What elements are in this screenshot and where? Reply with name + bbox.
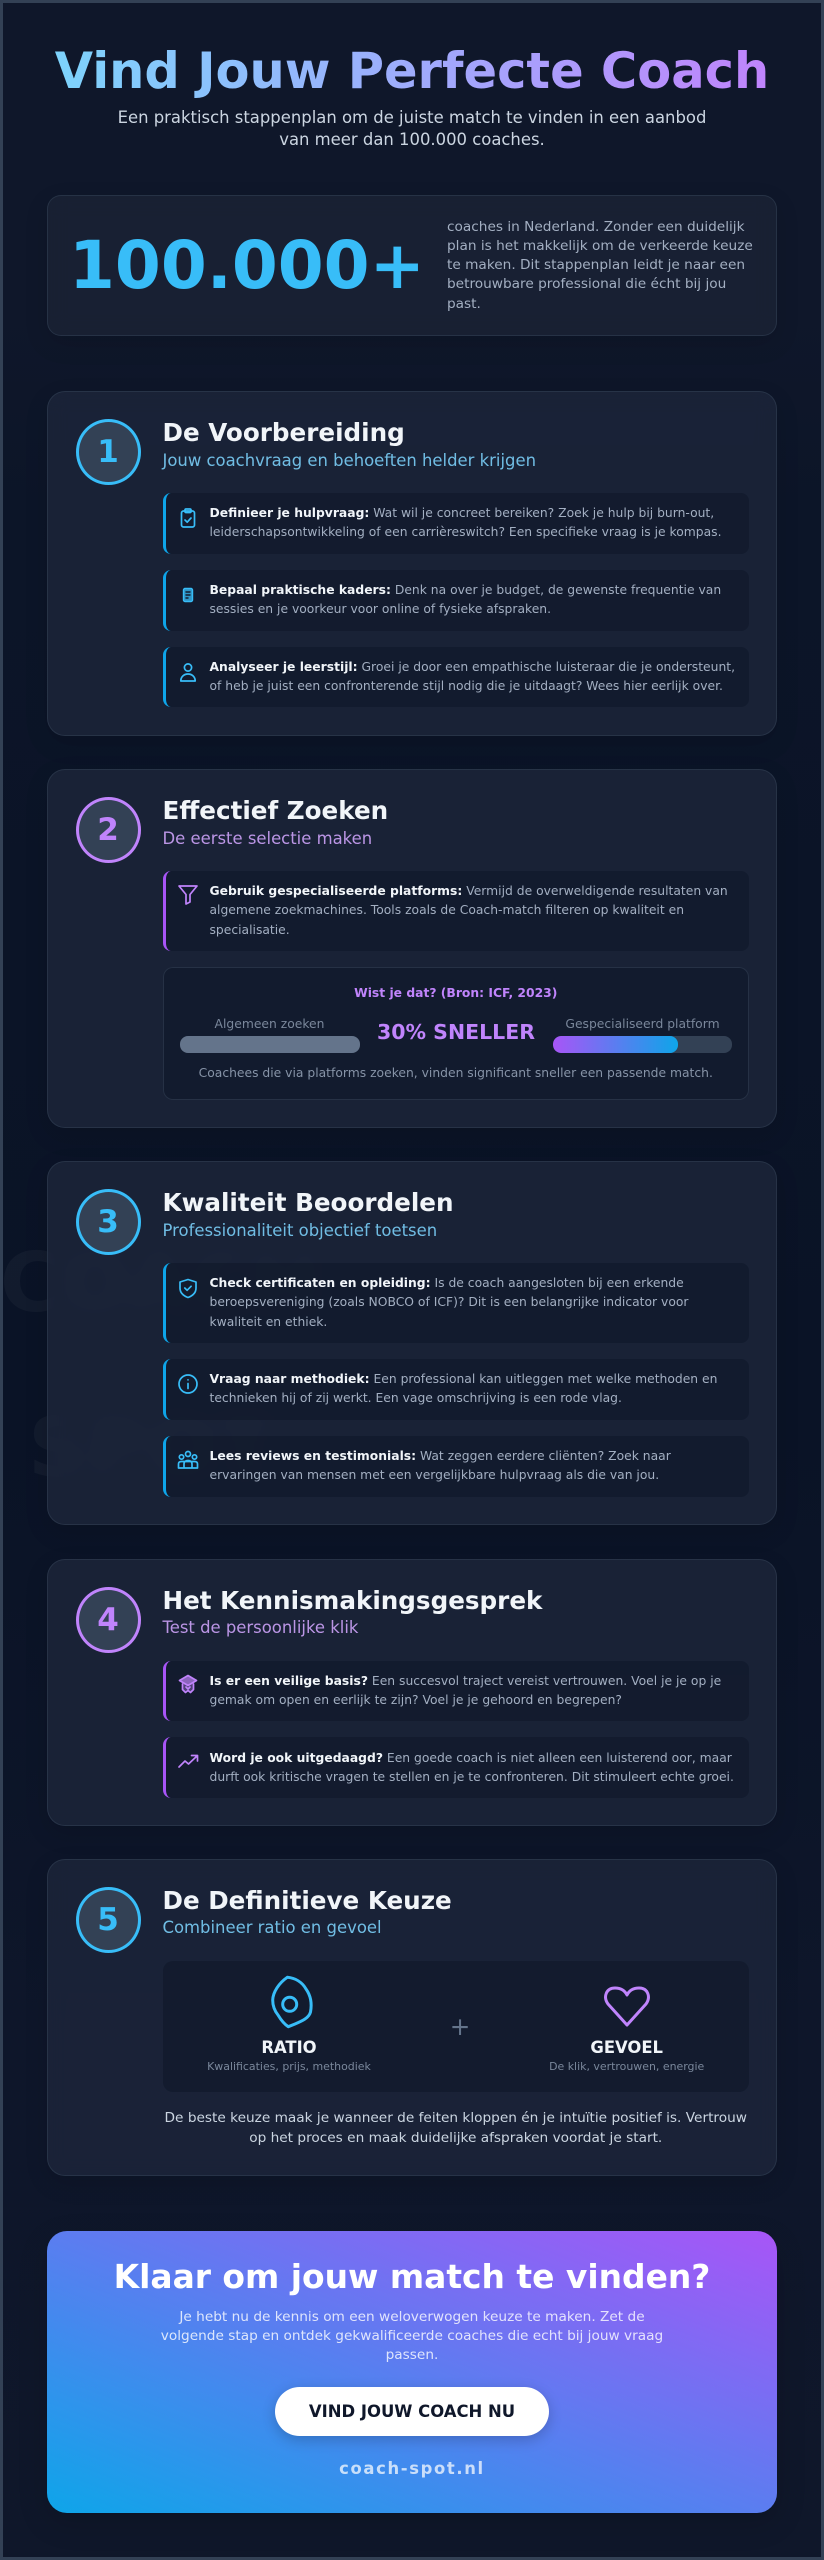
- subtitle: Een praktisch stappenplan om de juiste match te vinden in een aanbod: [118, 108, 706, 127]
- highlighted result: 30% SNELLER: [377, 1020, 535, 1044]
- subtitle: [118, 108, 706, 149]
- step 2 subheading: De eerste selectie maken: [162, 828, 372, 848]
- title: Vind Jouw Perfecte Coach: [55, 42, 769, 100]
- hero description: betrouwbare professional die écht bij jou: [447, 276, 726, 292]
- feeling label: GEVOEL: [590, 2038, 663, 2057]
- step 5 heading: De Definitieve Keuze: [162, 1886, 452, 1915]
- step 5 subheading: Combineer ratio en gevoel: [162, 1918, 382, 1937]
- item: veilige basis: [162, 1661, 749, 1721]
- step number 5: [76, 1887, 140, 1953]
- cta button: VIND JOUW COACH NU: [309, 2402, 515, 2421]
- item: hulpvraag: [162, 493, 749, 554]
- icon: ratio: [271, 1976, 313, 2028]
- step number 1: [76, 419, 140, 485]
- cta description: volgende stap en ontdek gekwalificeerde coaches die echt bij jouw vraag: [161, 2328, 663, 2344]
- plus sign: +: [450, 2012, 470, 2041]
- step 4 subheading: Test de persoonlijke klik: [162, 1618, 358, 1637]
- item: platforms: algemene zoekmachines. Tools zoals de Coach-match filteren op kwaliteit en: [210, 903, 684, 917]
- icon: info: [178, 1374, 198, 1394]
- item: hulpvraag: leiderschapsontwikkeling of een carrièreswitch? Een specifieke vraag is je kompas.: [210, 525, 722, 539]
- closing advice: [165, 2110, 747, 2146]
- item: leerstijl: Analyseer je leerstijl: Groei je door een empathische luisteraar die je ondersteunt,: [210, 660, 735, 674]
- background watermark: COACH: [0, 1236, 320, 1331]
- item: platforms: [162, 871, 749, 951]
- item: kaders: sessies en je voorkeur voor online of fysieke afspraken.: [210, 602, 551, 616]
- hero description: coaches in Nederland. Zonder een duidelijk: [447, 219, 745, 235]
- item: uitgedaagd: Word je ook uitgedaagd? Een goede coach is niet alleen een luisterend oor, maar: [210, 1751, 732, 1765]
- item: reviews: Lees reviews en testimonials: Wat zeggen eerdere cliënten? Zoek naar: [210, 1449, 671, 1463]
- panel: step 4: [47, 1559, 777, 1826]
- step 4 heading: Het Kennismakingsgesprek: [162, 1586, 542, 1615]
- ratio description: Kwalificaties, prijs, methodiek: [207, 2060, 371, 2073]
- did you know heading: Wist je dat? (Bron: ICF, 2023): [354, 986, 557, 1000]
- closing advice: De beste keuze maak je wanneer de feiten kloppen én je intuïtie positief is. Vertrouw: [165, 2110, 747, 2126]
- hero description: te maken. Dit stappenplan leidt je naar een: [447, 257, 745, 273]
- hero description: [447, 219, 753, 312]
- bar: specialised platform: [552, 1036, 732, 1052]
- item: veilige basis: gemak om open en eerlijk te zijn? Voel je je gehoord en begrepen?: [210, 1693, 622, 1707]
- icon: clipboard check: [180, 508, 196, 528]
- panel: ratio plus feeling: [162, 1961, 749, 2092]
- icon: users: [178, 1450, 198, 1469]
- step number 2: [76, 797, 140, 863]
- step 3 subheading: Professionaliteit objectief toetsen: [162, 1220, 437, 1240]
- step number 4: 4: [97, 1602, 119, 1638]
- panel: step 1: [47, 391, 777, 736]
- icon: trending up: [178, 1754, 198, 1768]
- hero description: past.: [447, 296, 481, 312]
- panel: call to action: [47, 2231, 777, 2513]
- icon: person: [180, 663, 196, 682]
- item: kaders: Bepaal praktische kaders: Denk na over je budget, de gewenste frequentie van: [210, 583, 721, 597]
- icon: graduation cap: [178, 1674, 198, 1694]
- cta description: passen.: [386, 2347, 438, 2363]
- big number: 100.000+: [69, 227, 425, 304]
- step 1 heading: De Voorbereiding: [162, 418, 405, 447]
- step number 3: 3: [97, 1204, 119, 1240]
- item: platforms: Gebruik gespecialiseerde platforms: Vermijd de overweldigende resultaten van: [210, 884, 728, 898]
- panel: step 2: [47, 769, 777, 1128]
- item: veilige basis: Is er een veilige basis? Een succesvol traject vereist vertrouwen. Voel je je op je: [210, 1674, 721, 1688]
- website: coach-spot.nl: [339, 2459, 485, 2478]
- icon: shield check: [179, 1278, 197, 1298]
- item: certificaten: [162, 1263, 749, 1343]
- item: leerstijl: [162, 647, 749, 707]
- item: certificaten: beroepsvereniging (zoals NOBCO of ICF)? Dit is een belangrijke indicator voor: [210, 1295, 688, 1309]
- cta description: [161, 2309, 663, 2363]
- icon: heart: [604, 1986, 650, 2027]
- panel: hero statistic: [47, 195, 777, 336]
- closing advice: op het proces en maak duidelijke afspraken voordat je start.: [249, 2130, 662, 2146]
- step number 4: [76, 1587, 140, 1653]
- cta description: Je hebt nu de kennis om een weloverwogen keuze te maken. Zet de: [179, 2309, 645, 2325]
- item: certificaten: kwaliteit en ethiek.: [210, 1315, 327, 1329]
- panel: did you know: [162, 967, 749, 1100]
- hero description: plan is het makkelijk om de verkeerde keuze: [447, 238, 753, 254]
- icon: document: [182, 588, 194, 602]
- comparison label: general search: Algemeen zoeken: [215, 1017, 324, 1031]
- cta button: [275, 2387, 549, 2436]
- background watermark: SPOT: [28, 1401, 273, 1496]
- item: uitgedaagd: [162, 1737, 749, 1798]
- feeling description: De klik, vertrouwen, energie: [549, 2060, 704, 2073]
- panel: step 3: [47, 1161, 777, 1525]
- item: reviews: ervaringen van mensen met een vergelijkbare hulpvraag als die van jou.: [210, 1468, 659, 1482]
- item: kaders: [162, 570, 749, 631]
- item: certificaten: Check certificaten en opleiding: Is de coach aangesloten bij een erkende: [210, 1276, 684, 1290]
- item: reviews: [162, 1436, 749, 1497]
- subtitle: van meer dan 100.000 coaches.: [279, 130, 545, 149]
- ratio label: RATIO: [261, 2038, 317, 2057]
- item: hulpvraag: Definieer je hulpvraag: Wat wil je concreet bereiken? Zoek je hulp bij burn-out,: [210, 506, 714, 520]
- item: uitgedaagd: durft ook kritische vragen te stellen en je te confronteren. Dit stimuleert echte groei.: [210, 1770, 734, 1784]
- step 1 subheading: Jouw coachvraag en behoeften helder krijgen: [162, 450, 536, 470]
- panel: step 5: [47, 1859, 777, 2176]
- item: leerstijl: of heb je juist een confronterende stijl nodig die je uitdaagt? Wees hier eerlijk over.: [210, 679, 723, 693]
- step number 3: [76, 1189, 140, 1255]
- step number 2: 2: [97, 812, 119, 848]
- bar: general search: [180, 1036, 360, 1052]
- item: methodiek: Vraag naar methodiek: Een professional kan uitleggen met welke methoden en: [210, 1372, 717, 1386]
- comparison label: specialised platform: Gespecialiseerd platform: [565, 1017, 720, 1031]
- cta heading: Klaar om jouw match te vinden?: [114, 2257, 710, 2296]
- background watermark: [0, 1230, 300, 1500]
- step 3 heading: Kwaliteit Beoordelen: [162, 1188, 454, 1217]
- item: methodiek: technieken hij of zij werkt. Een vage omschrijving is een rode vlag.: [210, 1391, 622, 1405]
- step number 1: 1: [97, 434, 119, 470]
- comparison caption: Coachees die via platforms zoeken, vinden significant sneller een passende match.: [199, 1066, 713, 1080]
- item: platforms: specialisatie.: [210, 923, 290, 937]
- step number 5: 5: [97, 1902, 119, 1938]
- item: methodiek: [162, 1359, 749, 1420]
- icon: funnel: [178, 885, 198, 905]
- step 2 heading: Effectief Zoeken: [162, 796, 388, 825]
